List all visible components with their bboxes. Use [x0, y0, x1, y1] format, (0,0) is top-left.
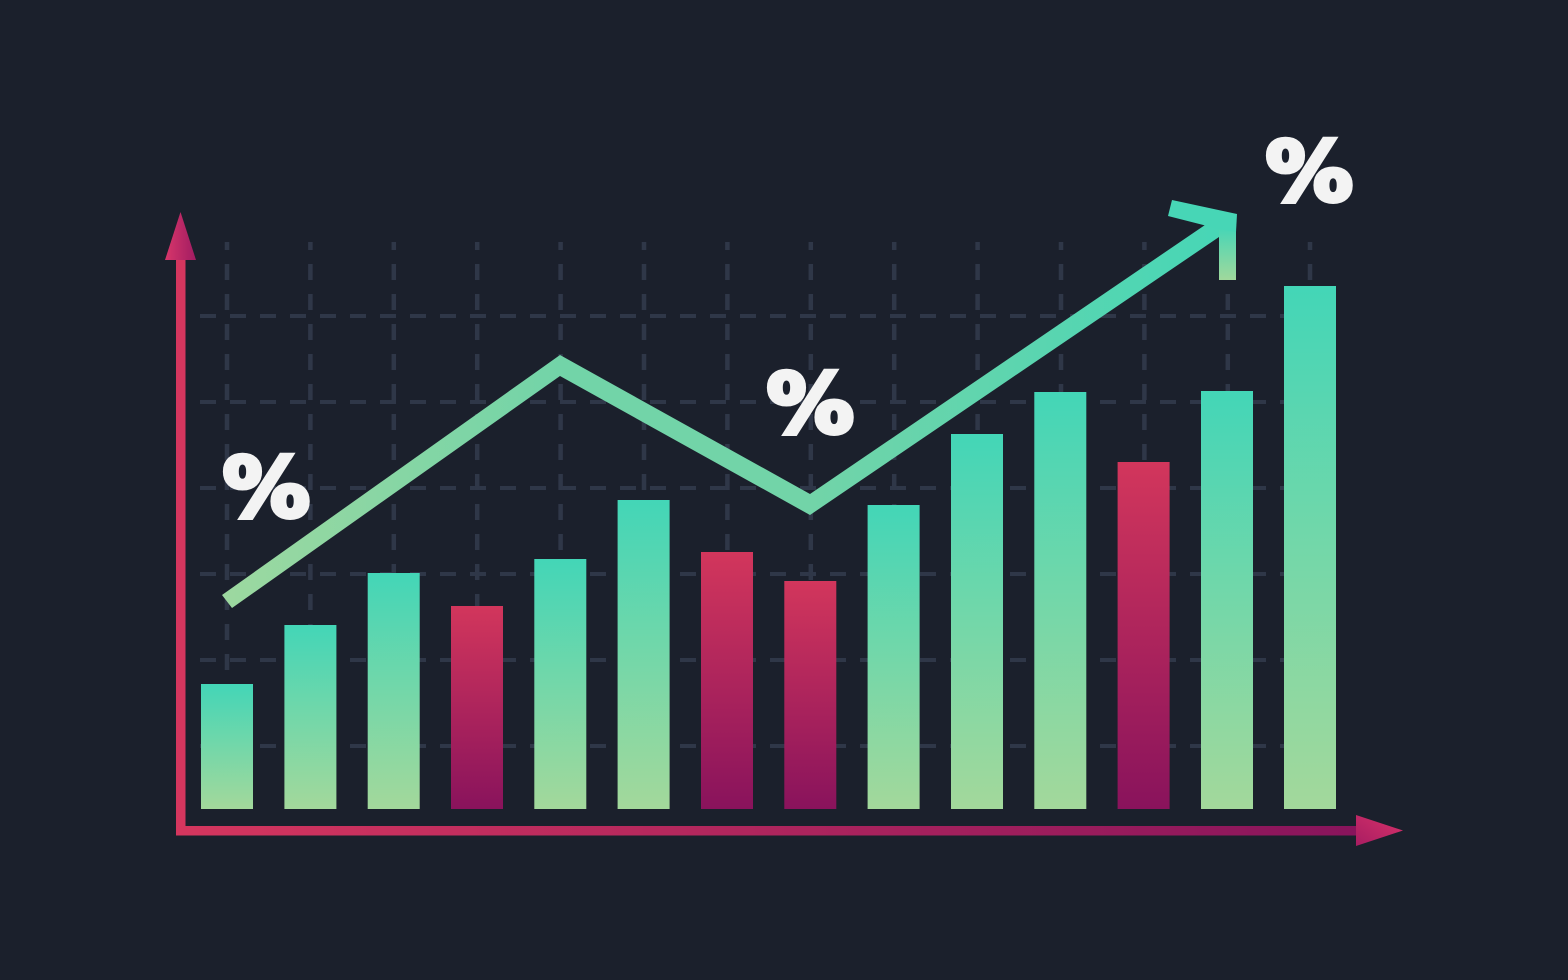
bar 14	[1284, 286, 1336, 809]
y axis arrowhead	[165, 212, 196, 260]
trend line	[222, 225, 1224, 608]
bar 12	[1118, 462, 1170, 809]
arrowhead bar	[1168, 200, 1237, 232]
x axis arrowhead	[1356, 815, 1403, 846]
percent sign left: %	[223, 441, 310, 536]
bar 11	[1034, 392, 1086, 809]
y axis line	[176, 255, 186, 835]
bar 5	[534, 559, 586, 809]
axes	[165, 212, 1403, 846]
x axis line	[176, 826, 1360, 836]
trend arrow	[222, 200, 1237, 608]
percent sign middle: %	[767, 357, 854, 452]
bar 9	[868, 505, 920, 809]
dashed grid	[200, 242, 1310, 746]
bar 4	[451, 606, 503, 809]
arrowhead stem	[1219, 220, 1236, 280]
bar 10	[951, 434, 1003, 809]
percent sign top right: %	[1266, 125, 1353, 220]
bar 13	[1201, 391, 1253, 809]
bar 2	[284, 625, 336, 809]
bar 8	[784, 581, 836, 809]
bar 7	[701, 552, 753, 809]
bar chart	[201, 286, 1336, 809]
bar 3	[368, 573, 420, 809]
bar 1	[201, 684, 253, 809]
bar 6	[618, 500, 670, 809]
